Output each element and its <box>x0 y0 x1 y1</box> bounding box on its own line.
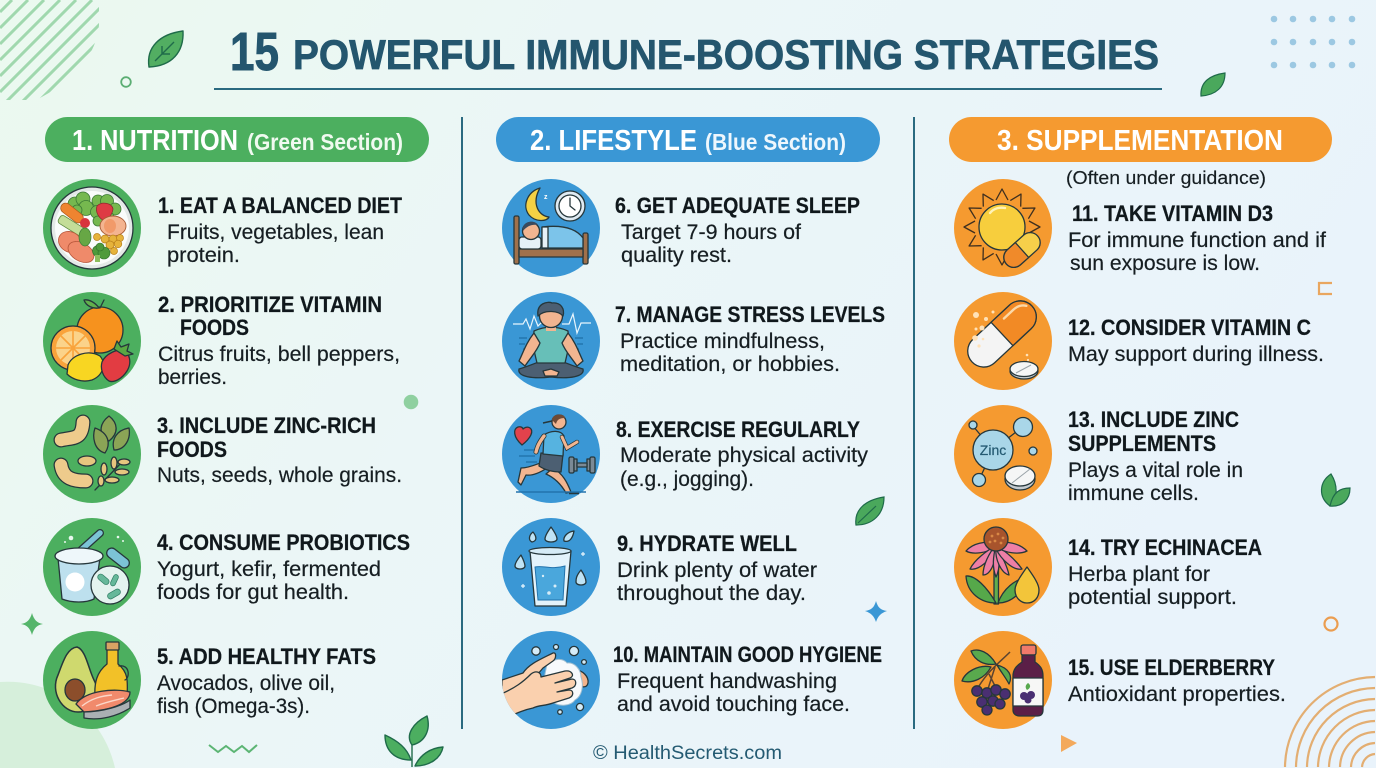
icon: meditating person <box>502 292 600 390</box>
item 7: stress <box>502 292 885 390</box>
heading: FOODS <box>180 315 249 340</box>
description: berries. <box>158 365 227 389</box>
icon: yogurt and bacteria <box>43 518 141 616</box>
item 14: echinacea <box>954 518 1262 616</box>
description: (e.g., jogging). <box>620 467 754 491</box>
panel: supplementation <box>949 117 1332 729</box>
section header: supplementation: 3. SUPPLEMENTATION <box>997 125 1283 157</box>
decoration: leaf top-right <box>1201 73 1225 96</box>
section header: supplementation <box>949 117 1332 162</box>
heading: 5. ADD HEALTHY FATS <box>157 644 376 669</box>
icon: capsule and tablet <box>954 292 1052 390</box>
title underline <box>214 88 1162 90</box>
description: May support during illness. <box>1068 342 1324 366</box>
description: Antioxidant properties. <box>1068 682 1286 706</box>
item 13: zinc <box>954 405 1243 505</box>
item 15: elderberry <box>954 631 1286 729</box>
description: Yogurt, kefir, fermented <box>157 557 381 581</box>
section header: lifestyle: (Blue Section) <box>705 129 846 155</box>
description: protein. <box>167 243 240 267</box>
decoration: top-left diagonal stripes <box>0 0 99 100</box>
decoration: top-right dot grid <box>1271 16 1355 68</box>
heading: 13. INCLUDE ZINC <box>1068 407 1239 432</box>
icon: glass of water <box>502 518 600 616</box>
description: Practice mindfulness, <box>620 329 825 353</box>
decoration: orange triangle <box>1061 735 1077 752</box>
description: foods for gut health. <box>157 580 349 604</box>
decoration: orange bracket <box>1319 283 1332 294</box>
title: POWERFUL IMMUNE-BOOSTING STRATEGIES <box>293 31 1159 78</box>
heading: 1. EAT A BALANCED DIET <box>158 193 402 218</box>
description: Frequent handwashing <box>617 669 837 693</box>
section header: nutrition: (Green Section) <box>247 129 403 155</box>
subheading: guidance note: (Often under guidance) <box>1066 167 1266 188</box>
item 5: healthy fats <box>43 631 376 729</box>
heading: FOODS <box>157 437 227 462</box>
heading: 4. CONSUME PROBIOTICS <box>157 530 410 555</box>
description: Drink plenty of water <box>617 558 817 582</box>
description: For immune function and if <box>1068 228 1326 252</box>
section header: lifestyle: 2. LIFESTYLE <box>530 125 697 157</box>
description: Herba plant for <box>1068 562 1210 586</box>
icon: bed with moon and clock <box>502 179 600 277</box>
item 2: vitamin foods <box>43 292 400 390</box>
heading: 12. CONSIDER VITAMIN C <box>1068 315 1311 340</box>
description: potential support. <box>1068 585 1237 609</box>
item 8: exercise <box>502 405 868 503</box>
description: Nuts, seeds, whole grains. <box>157 463 402 487</box>
description: meditation, or hobbies. <box>620 352 840 376</box>
icon: elderberries and syrup bottle <box>954 631 1052 729</box>
description: Target 7-9 hours of <box>621 220 801 244</box>
heading: 15. USE ELDERBERRY <box>1068 655 1275 680</box>
heading: 14. TRY ECHINACEA <box>1068 535 1262 560</box>
decoration: zigzag <box>209 745 257 752</box>
heading: 8. EXERCISE REGULARLY <box>616 417 860 442</box>
panel: nutrition <box>43 117 429 729</box>
heading: 11. TAKE VITAMIN D3 <box>1072 201 1273 226</box>
heading: 7. MANAGE STRESS LEVELS <box>615 302 885 327</box>
item 10: hygiene <box>501 631 882 729</box>
heading: 9. HYDRATE WELL <box>617 531 797 556</box>
heading: 10. MAINTAIN GOOD HYGIENE <box>613 642 882 667</box>
icon: bed with moon and clock: z <box>544 194 548 201</box>
decoration: dot <box>404 395 418 409</box>
item 12: vitamin C <box>954 292 1324 390</box>
item 6: sleep <box>502 179 860 277</box>
column divider right <box>913 117 915 729</box>
description: fish (Omega-3s). <box>157 694 310 718</box>
description: Plays a vital role in <box>1068 458 1243 482</box>
icon: zinc molecule and tablet: Zinc <box>980 442 1006 458</box>
section header: lifestyle <box>496 117 880 162</box>
decoration: plant sprout <box>385 716 443 767</box>
decoration: ring top-left <box>121 77 131 87</box>
description: Fruits, vegetables, lean <box>167 220 384 244</box>
title: 15 <box>230 22 279 82</box>
icon: citrus fruits <box>43 292 141 390</box>
icon: avocado, oil, salmon <box>43 631 141 729</box>
description: and avoid touching face. <box>617 692 850 716</box>
decoration: green sparkle <box>21 613 43 635</box>
heading: 6. GET ADEQUATE SLEEP <box>615 193 860 218</box>
description: Avocados, olive oil, <box>157 671 335 695</box>
description: immune cells. <box>1068 481 1199 505</box>
decoration: orange ring <box>1324 618 1338 630</box>
column divider left <box>461 117 463 729</box>
section header: nutrition: 1. NUTRITION <box>72 125 238 157</box>
description: Moderate physical activity <box>620 443 868 467</box>
icon: food plate <box>43 179 141 277</box>
heading: 2. PRIORITIZE VITAMIN <box>158 292 382 317</box>
icon: sun and capsule <box>954 179 1052 277</box>
decoration: double leaf right <box>1321 474 1350 506</box>
description: Citrus fruits, bell peppers, <box>158 342 400 366</box>
description: sun exposure is low. <box>1070 251 1260 275</box>
item 1: balanced diet <box>43 179 402 277</box>
title <box>230 22 1159 82</box>
decoration: leaf top-left <box>149 31 183 67</box>
item 3: zinc foods <box>43 405 402 503</box>
decoration: blue sparkle <box>865 601 887 622</box>
icon: handwashing <box>501 631 600 729</box>
icon: nuts and seeds <box>43 405 141 503</box>
item 9: hydrate <box>502 518 817 616</box>
icon: runner with heart and dumbbell <box>502 405 600 503</box>
item 4: probiotics <box>43 518 410 616</box>
footer: copyright: © HealthSecrets.com <box>593 743 782 764</box>
description: throughout the day. <box>617 581 806 605</box>
item 11: vitamin D3 <box>954 179 1326 277</box>
decoration: leaf center <box>856 497 884 525</box>
icon: zinc molecule and tablet <box>954 405 1052 503</box>
section header: nutrition <box>45 117 429 162</box>
heading: 3. INCLUDE ZINC-RICH <box>157 413 376 438</box>
heading: SUPPLEMENTS <box>1068 431 1216 456</box>
decoration: concentric arcs <box>1285 677 1375 767</box>
icon: echinacea flower and oil drop <box>954 518 1052 616</box>
description: quality rest. <box>621 243 732 267</box>
panel: lifestyle <box>496 117 885 729</box>
decoration: bottom-left soft circle <box>0 682 115 768</box>
